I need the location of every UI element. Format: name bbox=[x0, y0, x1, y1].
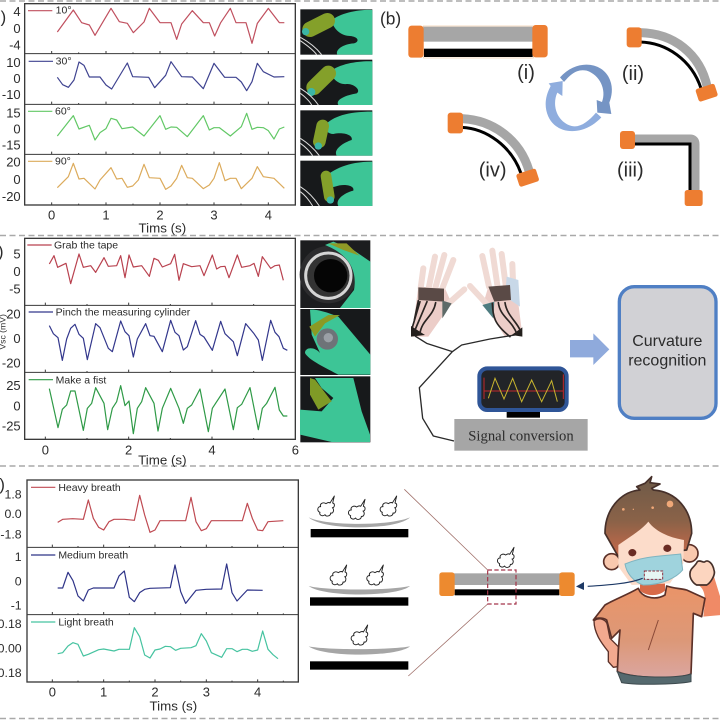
y axis labels c: 0 bbox=[13, 331, 21, 346]
line pinch the measuring cylinder bbox=[29, 308, 287, 360]
x axis e bbox=[49, 685, 261, 714]
x axis a: 3 bbox=[210, 207, 218, 222]
y axis labels a: -4 bbox=[9, 38, 21, 53]
panel c: gesture charts bbox=[0, 238, 370, 467]
mask bbox=[625, 554, 683, 585]
neck bbox=[640, 583, 665, 595]
y axis labels a: 0 bbox=[13, 172, 21, 187]
x axis e: Tims (s) bbox=[150, 699, 197, 714]
y axis labels a: 0 bbox=[13, 71, 21, 86]
photo grab the tape bbox=[300, 240, 370, 308]
y axis labels a: 4 bbox=[13, 4, 21, 19]
y axis labels c: -5 bbox=[9, 281, 21, 296]
x axis e: 3 bbox=[203, 685, 210, 700]
y axis labels e: -1.8 bbox=[0, 527, 22, 541]
monitor bbox=[479, 368, 567, 418]
left arm bbox=[594, 619, 618, 667]
sensor with breath bbox=[439, 547, 575, 604]
line 90 degrees: 90° bbox=[55, 156, 71, 167]
x axis c bbox=[42, 442, 299, 467]
line 10 degrees: 10° bbox=[56, 6, 72, 17]
y axis labels c: 20 bbox=[6, 307, 21, 322]
x axis c: 4 bbox=[208, 442, 216, 457]
line 90 degrees bbox=[28, 156, 284, 189]
panel a: angle bending charts bbox=[1, 4, 295, 236]
line 30 degrees bbox=[29, 56, 284, 91]
x axis a: 0 bbox=[48, 207, 55, 222]
x axis a: 1 bbox=[102, 207, 110, 222]
y axis labels a: -15 bbox=[2, 138, 21, 153]
curvature recognition box: recognition bbox=[628, 352, 706, 369]
photo 10 degrees bbox=[300, 9, 372, 55]
y axis labels c: 25 bbox=[6, 378, 21, 393]
fist bbox=[690, 561, 714, 585]
y axis labels e: 0.0 bbox=[5, 507, 22, 521]
x axis a: 2 bbox=[156, 207, 164, 222]
x axis e: 4 bbox=[254, 685, 261, 700]
shirt fold bbox=[648, 620, 658, 650]
y axis labels a: 0 bbox=[13, 21, 21, 36]
sensor state iii: (iii) bbox=[617, 159, 644, 181]
line make a fist: Make a fist bbox=[56, 375, 106, 386]
line 60 degrees bbox=[28, 106, 284, 140]
panel b: bending cycle diagram bbox=[380, 9, 718, 206]
label b: (b) bbox=[380, 9, 401, 29]
sensor state i: (i) bbox=[517, 62, 535, 84]
sensor state iv: (iv) bbox=[479, 160, 507, 182]
line grab the tape bbox=[27, 241, 283, 284]
x axis a: 4 bbox=[265, 207, 272, 222]
x axis a: Tims (s) bbox=[139, 221, 186, 236]
x axis c: 2 bbox=[125, 442, 132, 457]
hands with sensors bbox=[411, 251, 522, 337]
sensor state ii bbox=[622, 27, 718, 102]
y axis labels e: 1.8 bbox=[5, 487, 22, 501]
arrow: mask to sensor bbox=[588, 578, 643, 586]
y axis labels e: -1 bbox=[11, 598, 22, 612]
panel d: signal flow bbox=[415, 287, 716, 451]
line light breath: Light breath bbox=[58, 618, 114, 629]
photo make a fist bbox=[300, 376, 370, 442]
breath diagrams and sensor bbox=[309, 489, 575, 676]
y axis labels a: 10 bbox=[6, 55, 21, 70]
y axis labels a: -10 bbox=[2, 87, 21, 102]
line pinch the measuring cylinder: Pinch the measuring cylinder bbox=[56, 308, 191, 319]
icon: cycle arrows bbox=[546, 65, 612, 131]
line heavy breath bbox=[31, 483, 283, 532]
y axis labels e: 0 bbox=[15, 574, 22, 588]
line 30 degrees: 30° bbox=[56, 56, 72, 67]
line medium breath: Medium breath bbox=[58, 551, 128, 562]
sensor state i bbox=[408, 25, 548, 84]
signal conversion box bbox=[454, 419, 588, 451]
x axis a bbox=[48, 207, 272, 236]
y axis labels c: -20 bbox=[2, 356, 21, 371]
x axis c: 6 bbox=[292, 442, 299, 457]
hair bbox=[605, 477, 692, 557]
photos: finger bending bbox=[300, 9, 372, 206]
y axis labels c: -25 bbox=[2, 419, 21, 434]
line medium breath bbox=[31, 551, 263, 603]
panel e: breath charts bbox=[0, 475, 298, 714]
ears bbox=[604, 545, 698, 570]
signal conversion box: Signal conversion bbox=[468, 428, 574, 444]
y axis labels a: -20 bbox=[2, 189, 21, 204]
eyes bbox=[628, 545, 671, 556]
arrow head bbox=[576, 582, 584, 590]
x axis e: 0 bbox=[49, 685, 56, 700]
light breath diagram bbox=[309, 625, 410, 670]
line heavy breath: Heavy breath bbox=[58, 483, 121, 494]
sensor state iv bbox=[448, 113, 540, 187]
y axis labels e bbox=[0, 487, 22, 680]
line 60 degrees: 60° bbox=[55, 106, 71, 117]
boy with mask bbox=[588, 477, 720, 684]
y axis labels c: 0 bbox=[13, 398, 21, 413]
y axis labels a: 20 bbox=[6, 155, 21, 170]
y axis labels c: 5 bbox=[13, 247, 21, 262]
medium breath diagram bbox=[309, 565, 410, 606]
y axis labels e: 1 bbox=[15, 550, 22, 564]
photo 90 degrees bbox=[300, 161, 372, 206]
photo 30 degrees bbox=[300, 60, 372, 105]
line light breath bbox=[31, 618, 278, 659]
curvature recognition box: Curvature bbox=[632, 333, 703, 350]
y axis labels a: 15 bbox=[6, 105, 21, 120]
photo 60 degrees bbox=[300, 110, 372, 156]
line make a fist bbox=[29, 375, 287, 434]
sensor state ii: (ii) bbox=[622, 63, 644, 85]
left hand bbox=[411, 255, 464, 337]
arrow bbox=[570, 333, 609, 365]
wires bbox=[415, 335, 515, 441]
x axis e: 1 bbox=[100, 685, 107, 700]
y axis labels a bbox=[2, 4, 21, 204]
sensor state iii bbox=[617, 131, 703, 206]
hair spots bbox=[622, 501, 673, 511]
right hand bbox=[470, 251, 522, 337]
panel a: angle bending charts: ) bbox=[1, 8, 6, 27]
x axis c: 0 bbox=[42, 442, 49, 457]
x axis e: 2 bbox=[151, 685, 159, 700]
zoom lines bbox=[404, 489, 488, 676]
shorts bbox=[617, 672, 691, 684]
heavy breath diagram bbox=[309, 496, 410, 537]
line 10 degrees bbox=[28, 6, 284, 43]
right forearm bbox=[698, 577, 720, 617]
y axis labels c: 0 bbox=[13, 264, 21, 279]
curvature recognition box bbox=[619, 287, 716, 418]
y axis labels a: 0 bbox=[13, 122, 21, 137]
photo pinch cylinder bbox=[300, 309, 370, 375]
x axis c: Time (s) bbox=[138, 452, 187, 467]
face bbox=[618, 522, 684, 585]
line grab the tape: Grab the tape bbox=[54, 241, 118, 252]
y axis labels c bbox=[2, 247, 21, 434]
shirt bbox=[593, 586, 705, 678]
